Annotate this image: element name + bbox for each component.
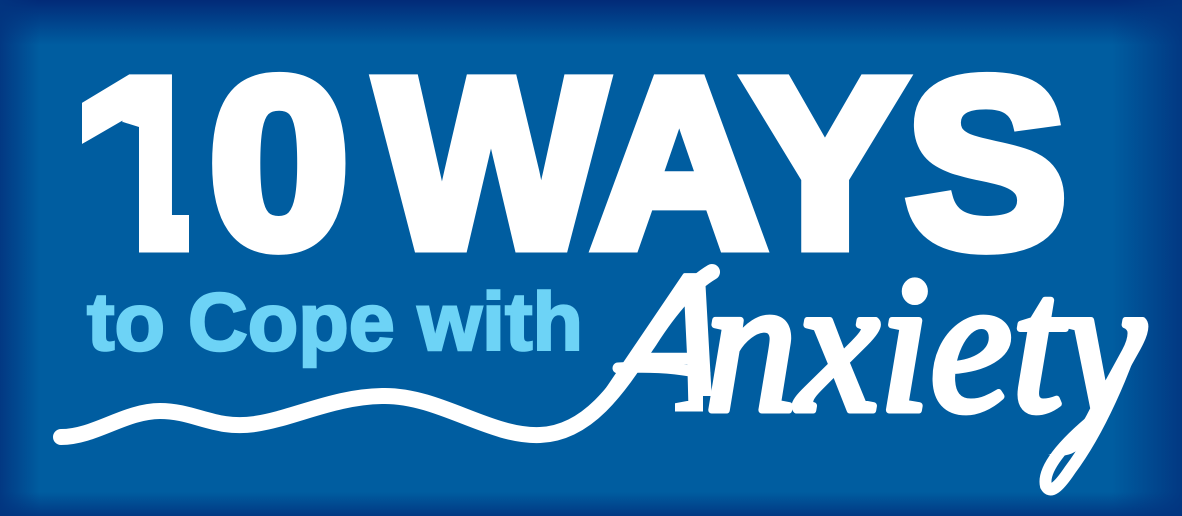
heading: 10 WAYS <box>60 29 1067 297</box>
script word: Anxiety <box>555 227 1145 489</box>
heading: 10 WAYS: WAYS <box>377 29 1067 297</box>
heading: 10 WAYS: 0 <box>209 29 349 297</box>
wave underline flowing into the script word <box>61 272 712 437</box>
script word: Anxiety: nxiety <box>705 237 1145 453</box>
heading: 10 WAYS: 1 <box>69 29 213 297</box>
subheading: to Cope with: to Cope with <box>87 277 583 368</box>
script word: Anxiety: A <box>578 227 748 455</box>
